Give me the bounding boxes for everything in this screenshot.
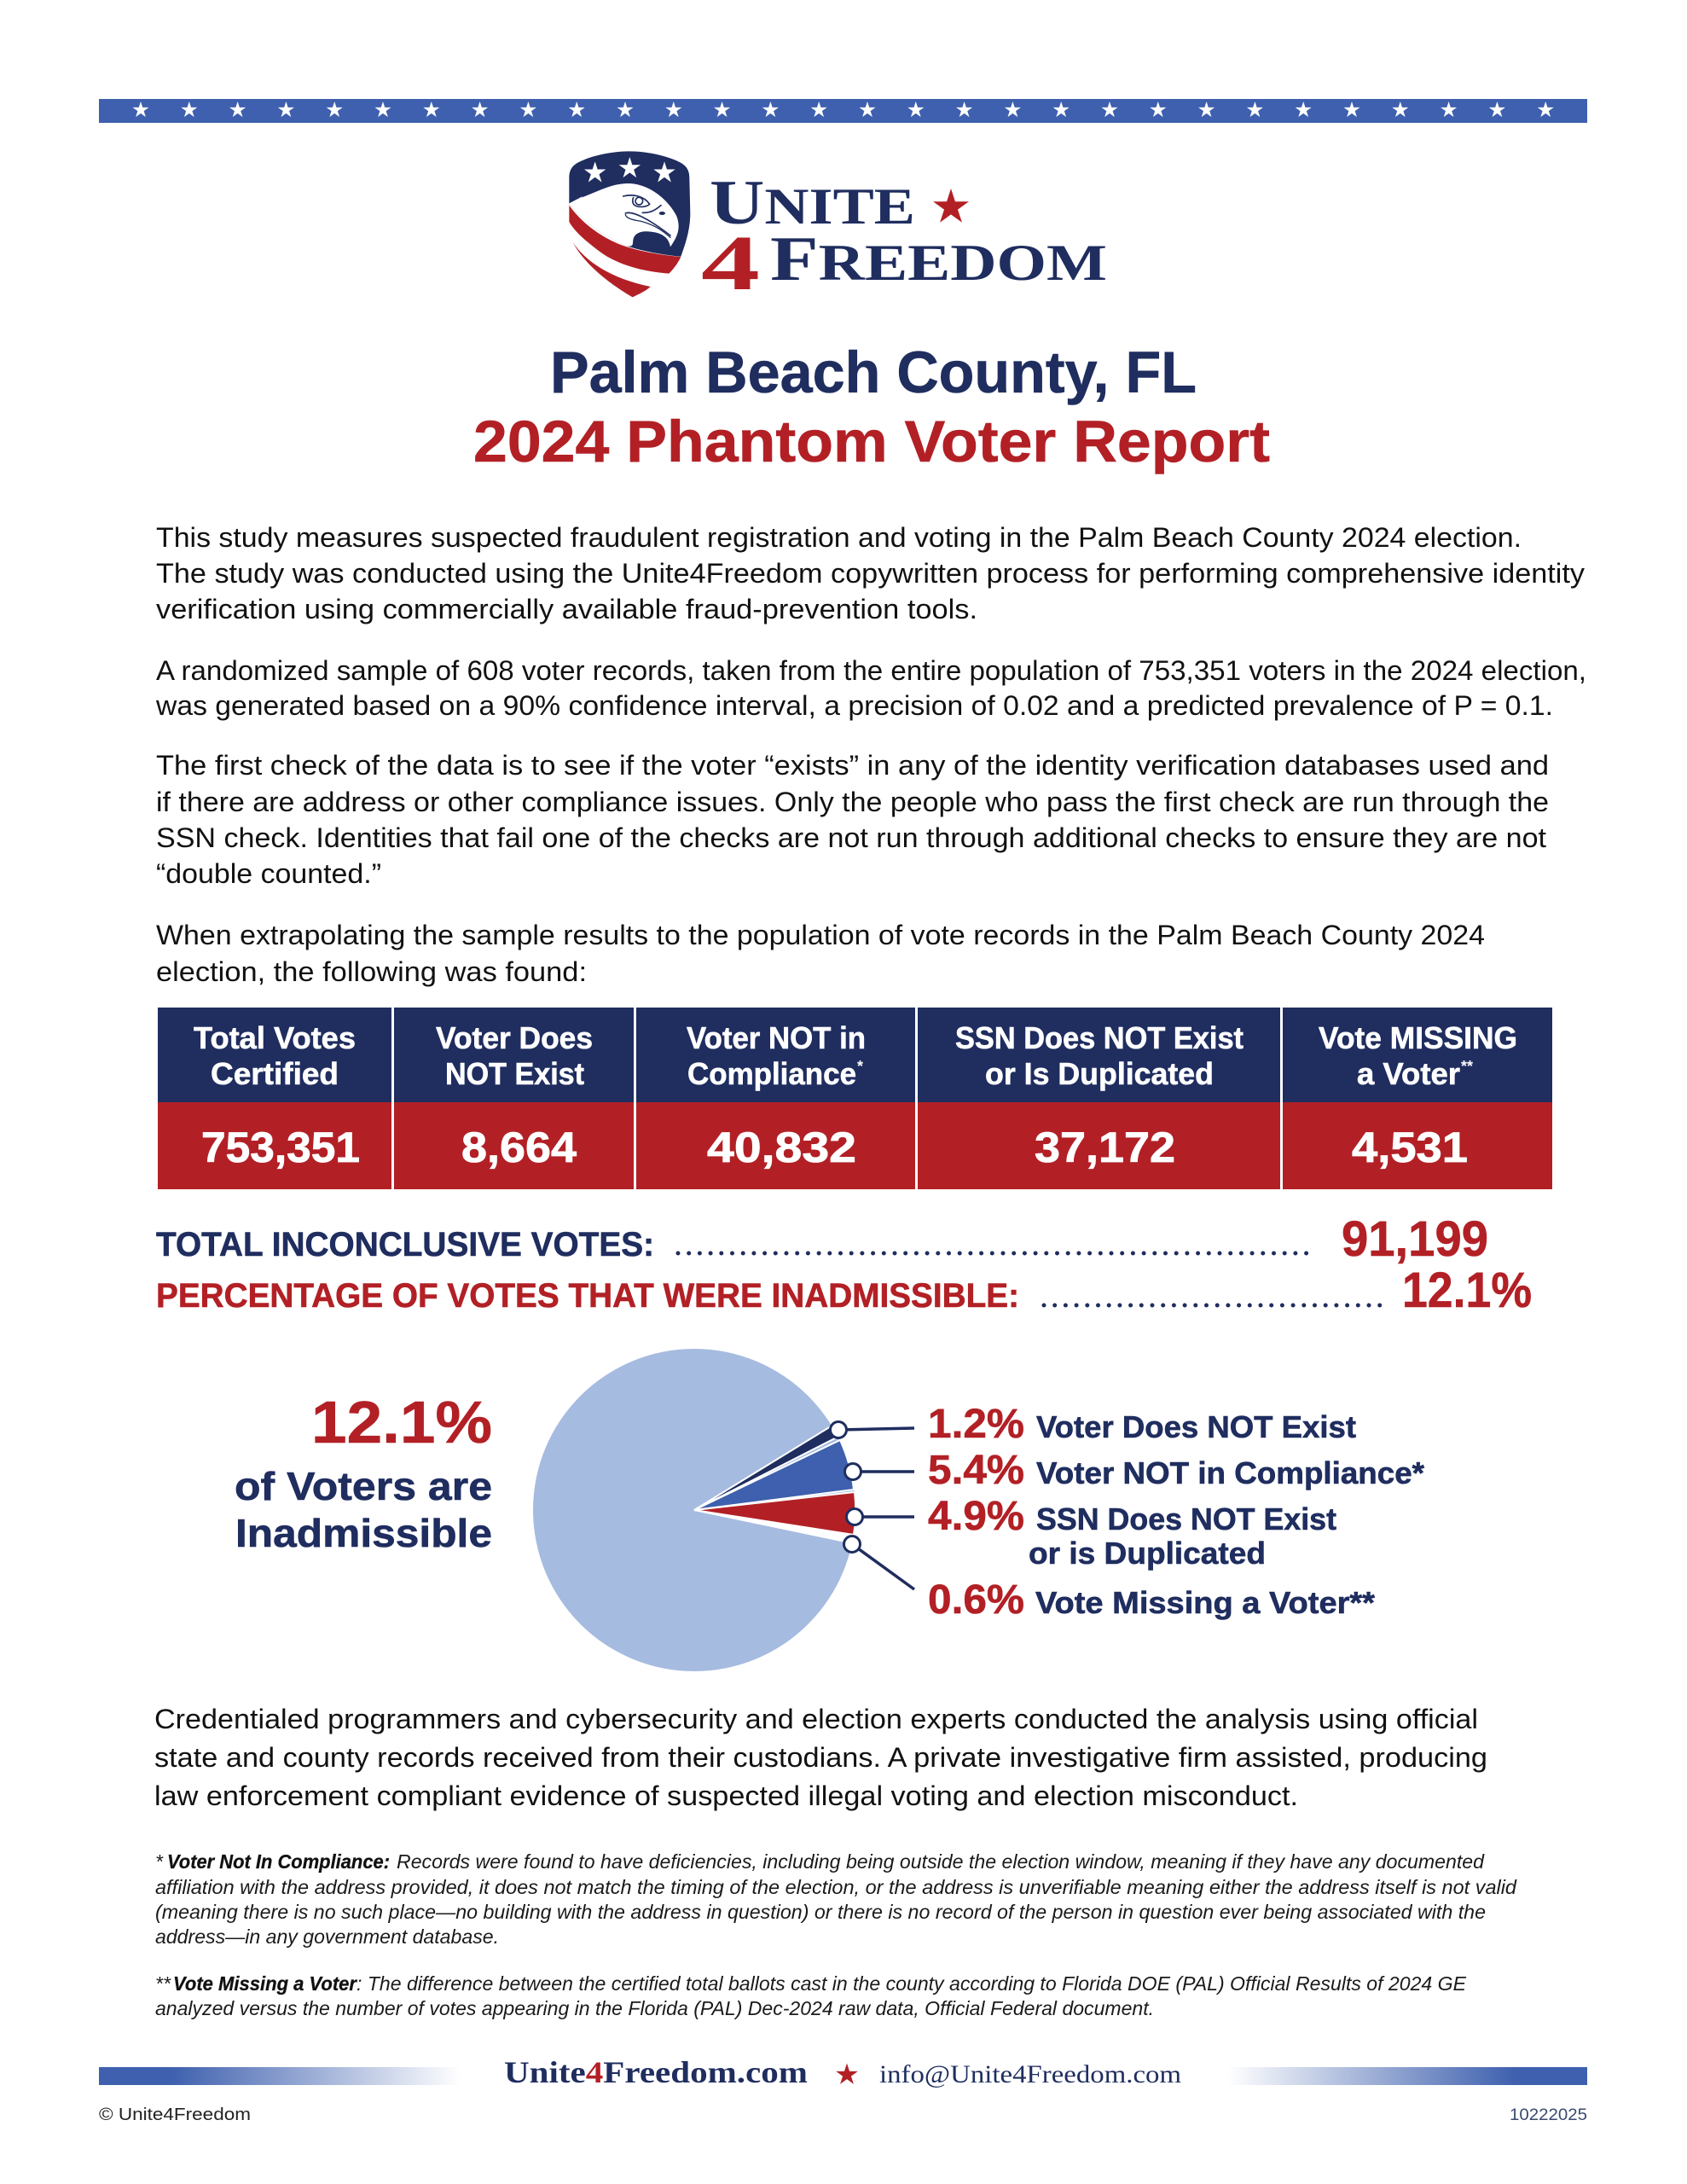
column: voter not in compliance [687, 1020, 866, 1171]
icon: footer star [836, 2063, 858, 2084]
column: vote missing a voter [1319, 1020, 1517, 1171]
icon: red star [933, 189, 969, 223]
text block: credentials: state and county records received from their custodians. A private investigative firm assisted, producing [154, 1742, 1487, 1773]
footnote: voter not in compliance: Voter Not In Compliance: [167, 1850, 390, 1873]
logo [569, 151, 1107, 306]
legend: voter not in compliance [928, 1448, 1424, 1493]
text block: checks: SSN check. Identities that fail one of the checks are not run through additional checks to ensure they are not [156, 822, 1546, 853]
footer website: Unite 4Freedom.com [504, 2055, 808, 2089]
summary: total inconclusive votes [156, 1211, 1488, 1267]
column: vote missing a voter: Vote MISSING [1319, 1020, 1517, 1055]
legend: vote missing a voter [928, 1577, 1375, 1623]
summary: total inconclusive votes: TOTAL INCONCLUSIVE VOTES: [156, 1226, 654, 1263]
footnote: voter not in compliance: Records were found to have deficiencies, including being outside the election window, meaning if they have any documented [397, 1850, 1485, 1873]
footnote: voter not in compliance [155, 1850, 1517, 1948]
logo wordmark: Unite: UNITE [710, 168, 915, 238]
callout: 12.1% of voters are inadmissible: of Voters are [235, 1464, 492, 1508]
star banner [99, 99, 1587, 123]
footer [99, 2055, 1587, 2124]
footer email: info@Unite4Freedom.com [879, 2060, 1181, 2088]
text block: extrapolation: election, the following was found: [156, 956, 587, 987]
callout: 12.1% of voters are inadmissible: 12.1% [311, 1389, 492, 1455]
document number: 10222025 [1510, 2106, 1587, 2124]
column: vote missing a voter: a Voter [1357, 1056, 1460, 1091]
column: voter does not exist: 8,664 [461, 1124, 577, 1171]
text block: study introduction: verification using commercially available fraud-prevention tools. [156, 594, 977, 624]
text block: study introduction: This study measures suspected fraudulent registration and voting in the Palm Beach County 2024 election. [156, 522, 1522, 553]
footnote: vote missing a voter: : The difference between the certified total ballots cast in the county according to Florida DOE (PAL) Official Results of 2024 GE [357, 1972, 1467, 1995]
footnote: vote missing a voter: analyzed versus the number of votes appearing in the Florida (PAL) Dec-2024 raw data, Official Federal document. [155, 1997, 1154, 2019]
legend: vote missing a voter: 0.6% [928, 1577, 1024, 1623]
text block: checks: “double counted.” [156, 858, 381, 889]
column: total votes certified [194, 1020, 360, 1171]
column: ssn does not exist: SSN Does NOT Exist [955, 1020, 1244, 1055]
legend: voter not in compliance: 5.4% [928, 1448, 1024, 1493]
footnote: vote missing a voter: Vote Missing a Voter [173, 1972, 357, 1995]
leader markers [831, 1421, 863, 1553]
summary: total inconclusive votes: 91,199 [1342, 1211, 1488, 1267]
logo wordmark: Freedom: FREEDOM [770, 224, 1107, 294]
column: voter does not exist: Voter Does [436, 1020, 593, 1055]
legend: ssn does not exist: or is Duplicated [1029, 1536, 1266, 1571]
text block: extrapolation [156, 920, 1485, 987]
text block: study introduction [156, 522, 1585, 624]
title: Palm Beach County, FL [550, 340, 1197, 405]
callout: 12.1% of voters are inadmissible [235, 1389, 492, 1555]
text block: study introduction: The study was conducted using the Unite4Freedom copywritten process for performing comprehensive identity [156, 558, 1585, 589]
column: voter not in compliance: Voter NOT in [687, 1020, 866, 1055]
text block: sample: was generated based on a 90% confidence interval, a precision of 0.02 and a predicted prevalence of P = 0.1. [155, 690, 1553, 721]
legend: voter does not exist: Voter Does NOT Exist [1036, 1409, 1356, 1444]
text block: sample: A randomized sample of 608 voter records, taken from the entire population of 753,351 voters in the 2024 election, [156, 655, 1586, 686]
column: total votes certified: Total Votes [194, 1020, 356, 1055]
text block: credentials: law enforcement compliant evidence of suspected illegal voting and election misconduct. [154, 1780, 1298, 1811]
data table [158, 1008, 1552, 1189]
column: voter does not exist [436, 1020, 593, 1171]
column: total votes certified: 753,351 [201, 1124, 360, 1171]
legend: voter does not exist: 1.2% [928, 1402, 1024, 1447]
summary: percentage inadmissible: 12.1% [1402, 1263, 1532, 1318]
text block: checks: if there are address or other compliance issues. Only the people who pass the first check are run through the [156, 787, 1549, 817]
column: voter not in compliance: 40,832 [707, 1124, 856, 1171]
column: ssn does not exist: 37,172 [1035, 1124, 1175, 1171]
pie chart [533, 1349, 914, 1671]
footnote: voter not in compliance: (meaning there is no such place—no building with the address in question) or there is no record of the person in question ever being associated with the [155, 1901, 1486, 1923]
column: total votes certified: Certified [211, 1056, 339, 1091]
column: ssn does not exist [955, 1020, 1244, 1171]
copyright: © Unite4Freedom [99, 2106, 251, 2124]
logo wordmark: 4: 4 [701, 219, 760, 306]
column: ssn does not exist: or Is Duplicated [985, 1056, 1214, 1091]
footnote: voter not in compliance: affiliation with the address provided, it does not match the timing of the election, or the address is unverifiable meaning either the address itself is not valid [155, 1876, 1517, 1898]
column: voter not in compliance: * [857, 1058, 863, 1075]
footnote: vote missing a voter: ** [155, 1972, 171, 1995]
column: vote missing a voter: ** [1461, 1058, 1473, 1075]
legend: vote missing a voter: Vote Missing a Voter** [1035, 1585, 1375, 1620]
legend: ssn does not exist: 4.9% [928, 1494, 1024, 1539]
footnote: vote missing a voter [155, 1972, 1467, 2019]
icon: eagle shield [569, 151, 690, 297]
text block: credentials: Credentialed programmers and cybersecurity and election experts conducted the analysis using official [154, 1704, 1478, 1734]
legend: voter does not exist [928, 1402, 1356, 1447]
text block: checks: The first check of the data is to see if the voter “exists” in any of the identity verification databases used and [156, 750, 1549, 781]
text block: credentials [154, 1704, 1487, 1811]
legend: ssn does not exist [928, 1494, 1336, 1571]
legend: ssn does not exist: SSN Does NOT Exist [1036, 1502, 1336, 1536]
footnote: voter not in compliance: * [155, 1850, 164, 1873]
column: voter does not exist: NOT Exist [445, 1056, 584, 1091]
title: 2024 Phantom Voter Report [473, 409, 1270, 474]
summary: percentage inadmissible [156, 1263, 1532, 1318]
text block: sample [155, 655, 1586, 721]
callout: 12.1% of voters are inadmissible: Inadmissible [235, 1511, 492, 1555]
summary: percentage inadmissible: PERCENTAGE OF VOTES THAT WERE INADMISSIBLE: [156, 1277, 1019, 1315]
text block: checks [156, 750, 1549, 889]
footnote: voter not in compliance: address—in any government database. [155, 1926, 499, 1948]
title [473, 340, 1270, 474]
text block: extrapolation: When extrapolating the sample results to the population of vote records in the Palm Beach County 2024 [156, 920, 1485, 950]
leader lines [838, 1428, 914, 1589]
column: vote missing a voter: 4,531 [1352, 1124, 1468, 1171]
column: voter not in compliance: Compliance [687, 1056, 856, 1091]
legend: voter not in compliance: Voter NOT in Compliance* [1036, 1455, 1424, 1490]
